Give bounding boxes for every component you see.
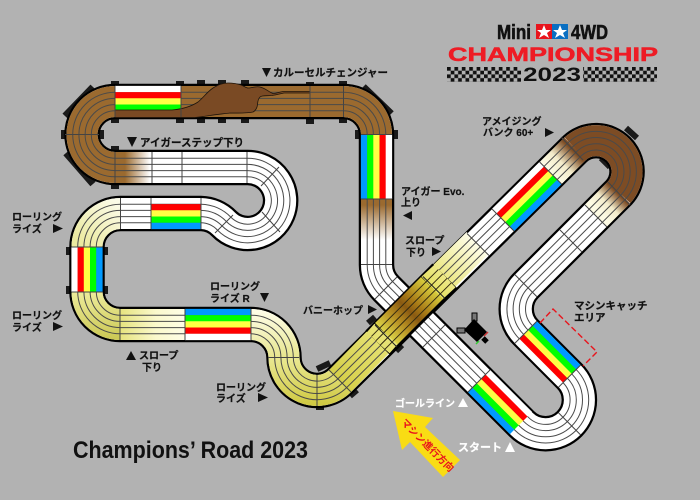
label: rolling rise 2 [12,309,63,334]
colour lane stripes [75,89,578,432]
label: slope down right: 下り [406,247,426,259]
label: rolling rise 2: ライズ [12,321,42,334]
label: rolling rise 1: ライズ [12,222,42,236]
track connector tabs [61,80,637,410]
label: eiger evo: 上り [401,196,421,209]
logo: 4WD: 4WD [571,22,608,44]
label: rolling rise 3 [216,381,268,405]
label: slope down left: スロープ [139,350,178,362]
label: machine catch area: エリア [574,312,606,324]
label: goal line [395,397,468,410]
label: slope down right [405,235,444,259]
race track [82,102,627,434]
label: amazing bank: アメイジング [482,115,542,128]
crossing upper track section [366,264,457,354]
label: amazing bank [482,115,554,139]
arrow label: マシン進行方向 [398,416,457,475]
start line stripes [470,372,530,432]
heading: carousel changer: カルーセルチェンジャー [273,67,388,79]
label: slope down left [126,350,178,374]
lane lines [72,92,637,444]
bottom horizontal stripes [185,312,251,337]
label: bunny hop: バニーホップ [303,305,363,317]
arrow: race direction [393,411,460,477]
top stripes [115,89,181,108]
label: eiger evo [401,185,465,220]
label: machine catch area: マシンキャッチ [574,300,648,312]
logo: twin star flag [536,24,568,39]
machine catch stripes [517,324,578,385]
logo: checkered flag right [583,67,657,82]
label: eiger evo: アイガー Evo. [401,185,465,198]
label: rolling rise R: ライズ R [210,292,250,305]
right vertical stripes [364,134,389,199]
logo: CHAMPIONSHIP: CHAMPIONSHIP [448,45,658,66]
brown top section [82,102,376,168]
heading: eiger step: アイガーステップ下り [140,136,244,149]
label: rolling rise R: ローリング [210,280,260,293]
label: slope down right: スロープ [405,235,444,247]
track section lines [65,86,630,435]
left vertical stripes [75,247,99,292]
icon: black control box [457,313,488,344]
label: rolling rise 2: ローリング [12,309,62,322]
label: amazing bank: バンク 60+ [483,127,533,139]
middle horizontal stripes [151,207,201,226]
logo: checkered flag left [447,67,521,82]
label: start: スタート [458,441,502,454]
label: goal line: ゴールライン [395,397,455,410]
label: rolling rise 1: ローリング [12,210,62,224]
upper diagonal stripes [494,164,559,229]
course title: Champions’ Road 2023 [73,437,308,464]
logo: Mini: Mini [497,22,531,44]
label: rolling rise 3: ライズ [216,392,246,405]
logo [447,22,658,86]
label: rolling rise 1 [12,210,63,236]
dark brown carousel changer ramp [115,83,310,118]
logo: year: 2023 [523,65,581,86]
machine catch area dashed box [540,309,597,366]
label: rolling rise R [210,280,269,305]
label: rolling rise 3: ローリング [216,381,266,394]
label: slope down left: 下り [142,362,162,374]
